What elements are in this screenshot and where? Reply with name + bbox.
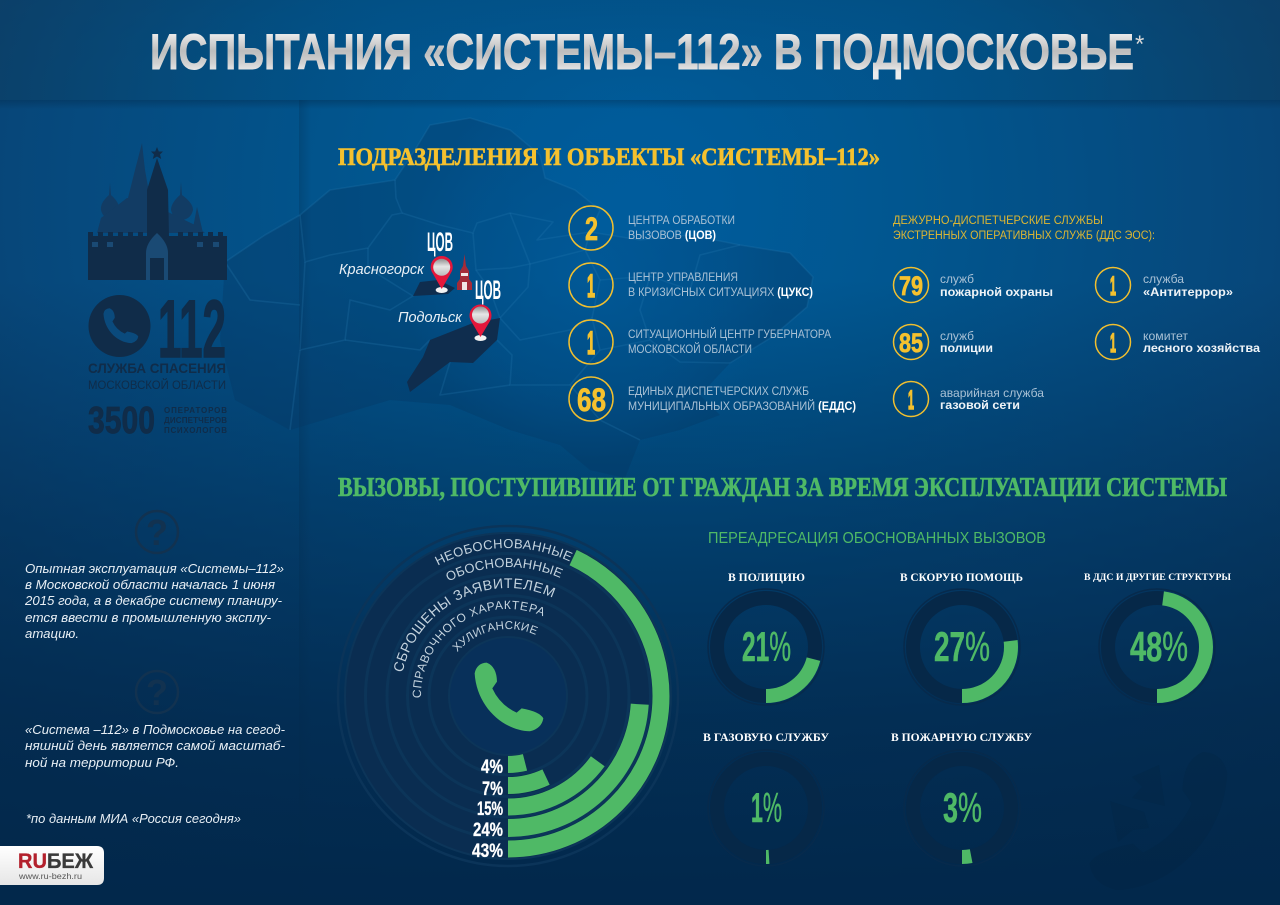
map markers: ЦОВ [427,227,453,257]
item: 1 crisis centre: В КРИЗИСНЫХ СИТУАЦИЯХ (ЦУКС) [628,287,813,299]
text: pilot operation: в Московской области началась 1 июня [25,577,275,592]
item: 1 situation centre: МОСКОВСКОЙ ОБЛАСТИ [628,343,752,356]
chart category labels [394,539,572,698]
left column logo [88,143,227,442]
item: 1 antiterror [1096,268,1233,302]
item: 85 police services [894,324,993,360]
chart values: 15% [477,799,503,820]
chart category labels: ХУЛИГАНСКИЕ [452,621,538,652]
donut: gas service 1%: 1% [751,784,782,831]
chart values: 7% [482,779,503,800]
map of Moscow region [220,80,813,478]
item: 1 crisis centre: ЦЕНТР УПРАВЛЕНИЯ [628,272,738,284]
icon: question mark 2: ? [146,672,168,713]
item: 2 call centres: 2 [585,211,598,247]
donut: gas service 1%: В ГАЗОВУЮ СЛУЖБУ [703,732,830,744]
donut: ambulance 27%: 27% [934,623,990,670]
map markers [339,227,501,341]
service name: СЛУЖБА СПАСЕНИЯ [88,360,226,376]
subheading: ДЕЖУРНО-ДИСПЕТЧЕРСКИЕ СЛУЖБЫ [893,215,1103,227]
number 112: 112 [158,284,226,375]
item: 1 antiterror: служба [1143,272,1184,286]
label: Krasnogorsk: Красногорск [339,261,425,278]
item: 85 police services: полиции [940,341,993,355]
donut: police 21% [708,572,824,705]
text: pilot operation: Опытная эксплуатация «Системы–112» [25,561,284,576]
donut: ambulance 27%: В СКОРУЮ ПОМОЩЬ [900,572,1023,584]
icon: phone [475,663,543,731]
radial bar chart: calls [337,524,678,867]
subheading: redirected calls: ПЕРЕАДРЕСАЦИЯ ОБОСНОВАННЫХ ВЫЗОВОВ [708,530,1046,547]
item: 85 police services: 85 [899,328,923,358]
item: 1 gas service: газовой сети [940,398,1020,412]
donut: police 21%: В ПОЛИЦИЮ [728,572,805,584]
chart category labels: СПРАВОЧНОГО ХАРАКТЕРА [412,600,544,698]
icon: faint phone with arrows [1089,752,1227,890]
logo: RUБЕЖ [0,846,104,885]
text: scale of the system [25,722,286,770]
donut: police 21%: 21% [742,623,791,670]
chart values: 43% [472,841,503,862]
panel: emergency services [893,215,1260,416]
icon: question mark 1: ? [146,512,168,553]
text: pilot operation: ется ввести в промышленную эксплу- [25,610,272,625]
item: 85 police services: служб [940,329,974,343]
chart values: 4% [481,757,503,778]
item: 2 call centres: ЦЕНТРА ОБРАБОТКИ [628,215,735,227]
donut: fire service 3% [891,732,1033,866]
logo: RUБЕЖ: www.ru-bezh.ru [18,871,82,881]
staff roles [164,406,227,435]
subheading [893,215,1155,242]
highlighted district: Krasnogorsk [413,280,455,296]
text: scale of the system: «Система –112» в Подмосковье на сегод- [25,722,286,737]
item: 1 gas service: 1 [908,385,914,415]
item: 1 situation centre [569,320,831,364]
staff roles: ПСИХОЛОГОВ [164,426,227,435]
item: 1 antiterror: 1 [1110,271,1116,301]
donut: ambulance 27% [900,572,1023,705]
staff number 3500: 3500 [88,400,155,442]
item: 1 gas service [894,382,1044,416]
donut: other structures 48%: В ДДС И ДРУГИЕ СТРУКТУРЫ [1084,573,1232,583]
item: 2 call centres: ВЫЗОВОВ (ЦОВ) [628,230,716,242]
item: 68 dispatch services: 68 [577,382,606,418]
chart category labels: ОБОСНОВАННЫЕ [446,558,563,580]
donut: other structures 48% [1084,573,1232,705]
item: 1 forestry committee: комитет [1143,329,1189,343]
text: pilot operation: 2015 года, а в декабре систему планиру- [24,593,283,608]
icon: question mark 1 [136,511,178,553]
title: * [1135,31,1144,58]
chart tracks [338,526,678,866]
panel: units list [569,206,856,421]
donut: fire service 3%: В ПОЖАРНУЮ СЛУЖБУ [891,732,1033,744]
chart category labels: СБРОШЕНЫ ЗАЯВИТЕЛЕМ [394,578,556,672]
chart values: 24% [473,820,503,841]
item: 79 fire services: служб [940,272,974,286]
staff roles: ДИСПЕТЧЕРОВ [164,416,227,425]
item: 1 situation centre: 1 [587,325,595,361]
footnote: *по данным МИА «Россия сегодня» [26,811,241,826]
item: 68 dispatch services: МУНИЦИПАЛЬНЫХ ОБРАЗОВАНИЙ (ЕДДС) [628,400,856,413]
donut: fire service 3%: 3% [943,784,982,831]
item: 79 fire services: пожарной охраны [940,285,1053,299]
item: 1 antiterror: «Антитеррор» [1143,285,1233,299]
icon: question mark 2 [136,671,178,713]
item: 1 forestry committee: 1 [1110,328,1116,358]
icon: Kremlin tower [457,254,472,290]
text: pilot operation [24,561,284,641]
pin: Podolsk [470,304,492,341]
subheading: ЭКСТРЕННЫХ ОПЕРАТИВНЫХ СЛУЖБ (ДДС ЭОС): [893,230,1155,242]
logo: RUБЕЖ: RUБЕЖ [18,850,94,873]
region name: МОСКОВСКОЙ ОБЛАСТИ [88,377,226,392]
label: Podolsk: Подольск [398,309,463,326]
pin: Krasnogorsk [431,256,453,293]
item: 1 situation centre: СИТУАЦИОННЫЙ ЦЕНТР ГУБЕРНАТОРА [628,328,831,341]
item: 1 gas service: аварийная служба [940,386,1044,400]
item: 79 fire services: 79 [899,271,923,301]
item: 1 crisis centre [569,263,813,307]
icon: Kremlin silhouette [88,143,227,280]
item: 2 call centres [569,206,735,250]
item: 1 forestry committee [1096,324,1260,360]
text: scale of the system: ной на территории РФ. [25,755,179,770]
chart values [472,757,503,862]
icon: phone circle [88,295,150,357]
donut: gas service 1% [703,732,830,866]
item: 1 forestry committee: лесного хозяйства [1143,341,1260,355]
text: pilot operation: атацию. [25,626,79,641]
chart bars [355,543,661,849]
chart category labels: НЕОБОСНОВАННЫЕ [434,539,572,566]
heading: units and facilities: ПОДРАЗДЕЛЕНИЯ И ОБЪЕКТЫ «СИСТЕМЫ–112» [338,144,880,171]
item: 68 dispatch services [569,377,856,421]
item: 79 fire services [894,268,1053,302]
text: scale of the system: няшний день является самой масштаб- [25,738,286,753]
highlighted district: Podolsk [407,318,500,392]
item: 68 dispatch services: ЕДИНЫХ ДИСПЕТЧЕРСКИХ СЛУЖБ [628,386,809,398]
staff roles: ОПЕРАТОРОВ [164,406,227,415]
donut: other structures 48%: 48% [1130,623,1188,670]
item: 1 crisis centre: 1 [587,268,595,304]
text: ЦОВ [475,275,501,305]
